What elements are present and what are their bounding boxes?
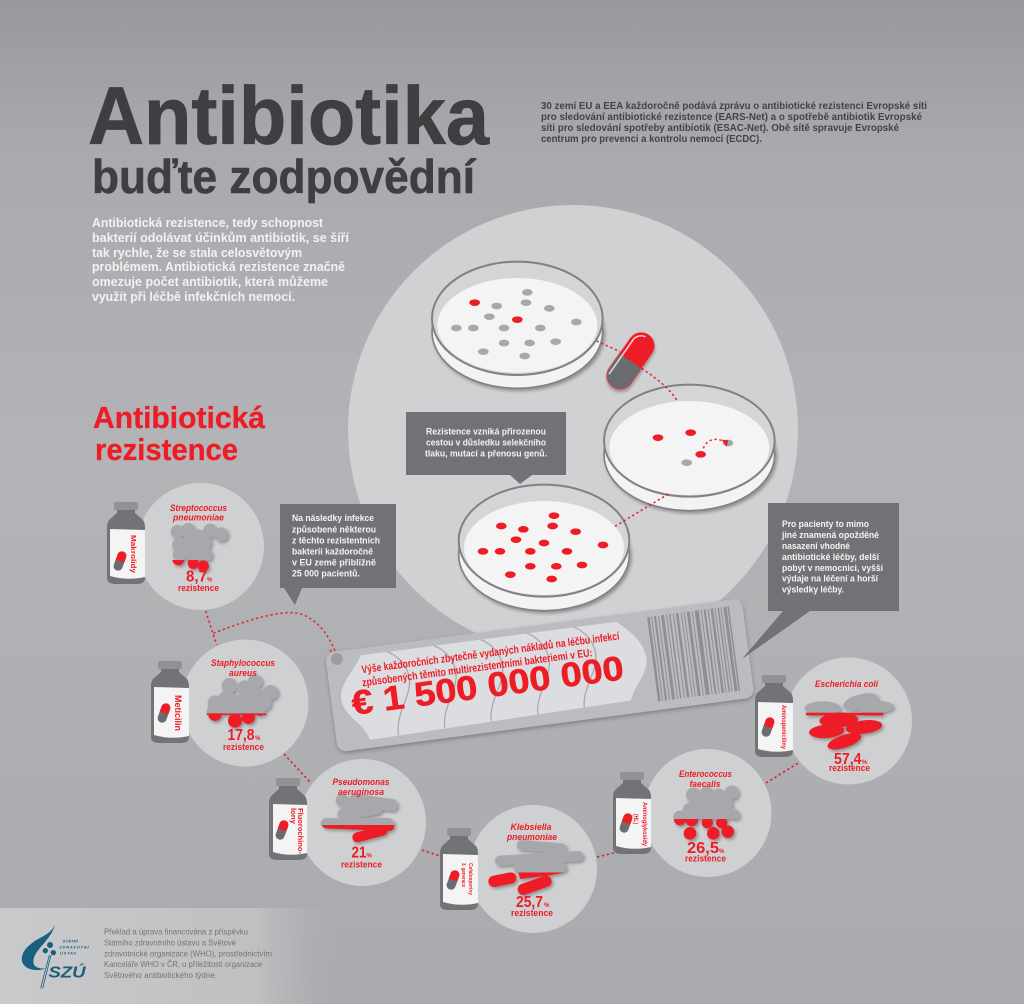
resistance rate [685, 840, 726, 864]
bacterium name: Enterococcus [679, 769, 732, 780]
resistance rate: % [207, 578, 213, 584]
text block: left intro: omezuje počet antibiotik, která můžeme [92, 275, 328, 289]
text block: top right intro: síti pro sledování spotřeby antibiotik (ESAC-Net). Obě sítě spravuje Evropské [541, 122, 899, 134]
amount: € 1 500 000 000 [349, 649, 626, 723]
text block: top right intro: 30 zemí EU a EEA každoročně podává zprávu o antibiotické rezistenci Evropské síti [541, 100, 927, 112]
resistance rate: rezistence [223, 742, 264, 753]
text block: left intro: využít při léčbě infekčních nemocí. [92, 290, 295, 304]
footer panel [0, 908, 340, 1004]
logo: SZÚ: STÁTNÍ [63, 939, 79, 944]
heading: Antibiotická rezistence: Antibiotická [93, 400, 266, 435]
large light circle [348, 205, 798, 655]
antibiotic name: Aminoglykosidy [641, 802, 647, 847]
callout: resistance origin: Rezistence vzniká přirozenou [426, 426, 546, 438]
callout: infections: 25 000 pacientů. [292, 568, 360, 580]
bacterium name: Pseudomonas [332, 777, 390, 788]
bubble: Klebsiella pneumoniae 25,7 % [469, 805, 597, 933]
text block: footer credits [104, 926, 272, 980]
bacteria: streptococcus [171, 523, 228, 572]
tag text: Výše každoročních zbytečně vydaných nákladů na léčbu infekcí [361, 630, 621, 676]
resistance rate: rezistence [178, 583, 219, 594]
resistance rate: % [255, 736, 261, 742]
dotted lines between bubbles [206, 611, 337, 657]
bottle: Cefalosporiny 3. generace [440, 828, 478, 910]
dotted line: Staphylococcus to Pseudomonas [284, 754, 310, 782]
antibiotic name: Fluorochino- [296, 808, 303, 855]
text block: footer credits: Překlad a úprava financována z příspěvku [104, 926, 248, 936]
bacterium name: pneumoniae [172, 512, 225, 524]
callout: patient consequences: jiné znamená opožděné [781, 530, 879, 541]
resistance rate: % [862, 760, 868, 766]
bubble: Staphylococcus aureus 17,8 % [182, 640, 308, 766]
bacterium name: Escherichia coli [815, 679, 878, 690]
title [88, 71, 490, 203]
title: buďte zodpovědní [92, 150, 477, 203]
tag text second line: způsobených těmito multirezistentními bakteriemi v EU: [362, 647, 593, 689]
heading: Antibiotická rezistence [93, 400, 266, 467]
text block: top right intro: centrum pro prevenci a kontrolu nemocí (ECDC). [541, 133, 762, 145]
title: Antibiotika [88, 71, 490, 162]
dish 1: mostly grey bacteria [432, 262, 603, 388]
bottle: Aminoglykosidy (HL) [613, 772, 651, 854]
callout: patient consequences: antibiotické léčby, delší [782, 552, 879, 563]
icon: capsule [445, 869, 461, 891]
resistance rate: % [544, 903, 550, 909]
callout: patient consequences: nasazení vhodné [782, 541, 850, 552]
bacteria: E. coli rods [805, 690, 894, 753]
antibiotic name [460, 863, 473, 896]
resistance rate: 57,4 [834, 751, 862, 768]
bacterium name: pneumoniae [506, 832, 558, 843]
resistance rate: rezistence [829, 763, 870, 774]
resistance rate [178, 568, 219, 594]
text block: footer credits: zdravotnické organizace (WHO), prostřednictvím [104, 948, 272, 958]
callout: patient consequences: výdaje na léčení a horší [782, 574, 878, 584]
dotted links between dishes [597, 341, 677, 527]
bottle: Fluorochinolony [269, 778, 307, 860]
logo: SZÚ: ZDRAVOTNÍ [58, 945, 90, 950]
bacterium name: faecalis [690, 779, 720, 790]
resistance rate [223, 727, 264, 753]
antibiotic name: Meticilin [173, 695, 183, 731]
hole [330, 652, 344, 666]
barcode [647, 606, 740, 701]
resistance rate [341, 844, 382, 870]
antibiotic name: (HL) [632, 814, 638, 824]
callout: infections: způsobené některou [292, 524, 376, 536]
petri dishes and capsule [432, 262, 775, 611]
icon: capsule [156, 702, 172, 724]
bubble: Enterococcus faecalis 26,5 % [644, 749, 772, 877]
text block: footer credits: Světového antibiotického týdne. [104, 970, 217, 980]
antibiotic name: 3. generace [460, 863, 466, 887]
callout: infections: v EU země přibližně [292, 558, 376, 568]
callout: patient consequences [742, 503, 899, 659]
text block: footer credits: Kanceláře WHO v ČR, u příležitosti organizace [104, 959, 262, 969]
icon: capsule [112, 550, 128, 572]
bubble: Escherichia coli 57,4 % [785, 658, 912, 784]
heading: Antibiotická rezistence: rezistence [95, 432, 238, 467]
bottle: Meticilin [151, 661, 189, 743]
bottle: Makrolidy [107, 502, 145, 584]
resistance rate: 17,8 [228, 727, 255, 744]
callout: infections: bakterií každoročně [292, 546, 373, 558]
bacterium name: Staphylococcus [211, 658, 275, 669]
resistance rate: % [366, 854, 372, 860]
callout: resistance origin [406, 412, 566, 484]
dotted line: Klebsiella to Enterococcus [597, 852, 618, 857]
antibiotic name: Aminopeniciliny [780, 705, 786, 750]
text block: left intro: tak rychle, že se stala celosvětovým [92, 246, 302, 260]
text block: left intro: problémem. Antibiotická rezistence značně [92, 260, 345, 274]
bacterium name [679, 769, 732, 790]
strip perforations [387, 625, 603, 735]
bacterium name [332, 777, 390, 798]
bacterium name: Klebsiella [510, 822, 552, 833]
resistance rate: rezistence [511, 908, 553, 919]
bacterium name: aeruginosa [338, 787, 384, 798]
bacteria: enterococcus [673, 785, 739, 840]
bacterium name: Streptococcus [170, 503, 227, 514]
callout: resistance origin: cestou v důsledku selekčního [426, 438, 546, 448]
logo: SZÚ: ÚSTAV [60, 950, 76, 955]
resistance rate [511, 894, 553, 919]
text block: top right intro: pro sledování antibiotické rezistence (EARS-Net) a o spotřebě antibiotik Evropské [541, 111, 922, 123]
text block: footer credits: Státního zdravotního ústavu a Světové [104, 938, 236, 948]
text block: top right intro [541, 100, 927, 145]
bacterium name: aureus [229, 668, 257, 679]
callout: patient consequences: pobyt v nemocnici, vyšší [782, 563, 883, 574]
bacteria: staphylococcus [207, 674, 278, 728]
resistance rate: % [719, 849, 725, 855]
text block: left intro: Antibiotická rezistence, tedy schopnost [92, 216, 324, 230]
icon: capsule [602, 327, 660, 394]
text block: left intro: bakterií odolávat účinkům antibiotik, se šíří [92, 231, 350, 245]
bacterium name [506, 822, 558, 843]
bacterium name [211, 658, 275, 679]
icon: capsule [760, 716, 776, 738]
dotted line: Enterococcus to E. coli [766, 762, 800, 783]
bacteria: pseudomonas rods [327, 800, 392, 837]
dish 3: resistant bacteria [459, 485, 629, 611]
resistance rate: 8,7 [186, 568, 207, 586]
logo: SZÚ [22, 925, 90, 988]
bottle: Aminopeniciliny [755, 675, 793, 757]
logo: SZÚ: SZÚ [48, 963, 87, 981]
dish 2: surviving bacteria and gene transfer [604, 385, 775, 511]
antibiotic name: lony [289, 808, 296, 824]
antibiotic name: Cefalosporiny [467, 863, 473, 896]
callout: patient consequences: Pro pacienty to mimo [782, 519, 869, 530]
resistance rate: rezistence [685, 854, 726, 864]
price tag [325, 598, 754, 752]
bacteria: klebsiella rods [494, 845, 578, 889]
resistance rate: 25,7 [516, 894, 543, 911]
callout: infections: Na následky infekce [292, 513, 374, 524]
dotted line: Pseudomonas to Klebsiella [422, 850, 440, 856]
callout: patient consequences: výsledky léčby. [782, 584, 844, 596]
text block: left intro [92, 216, 350, 304]
icon: capsule [274, 819, 290, 841]
resistance rate: 21 [352, 844, 367, 862]
callout: infections [280, 504, 396, 605]
antibiotic name [289, 808, 303, 855]
antibiotic name [632, 802, 647, 847]
bacterium name [170, 503, 227, 524]
bubble: Pseudomonas aeruginosa 21 % [299, 759, 426, 886]
antibiotic name: Makrolidy [129, 535, 138, 574]
resistance rate: rezistence [341, 860, 382, 870]
callout: resistance origin: tlaku, mutací a přenosu genů. [425, 448, 547, 460]
resistance rate: 26,5 [687, 840, 719, 857]
callout: infections: z těchto rezistentních [292, 536, 380, 546]
resistance rate [829, 751, 870, 774]
tag strip [336, 618, 652, 743]
icon: capsule [618, 812, 634, 834]
bubble: Streptococcus pneumoniae 8,7 % [137, 483, 264, 610]
